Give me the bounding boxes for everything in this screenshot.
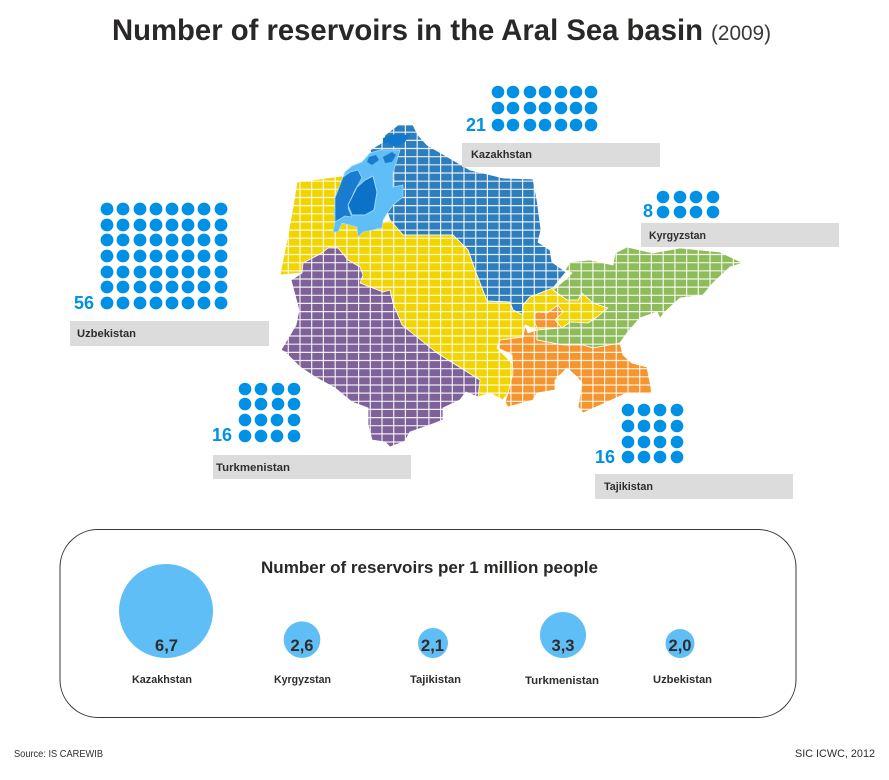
label bar: Uzbekistan: Uzbekistan: [77, 328, 136, 340]
label bar: Turkmenistan: Turkmenistan: [216, 462, 290, 474]
label bar: Kazakhstan: [462, 143, 660, 167]
bubble: Kazakhstan: [119, 564, 213, 686]
count: Turkmenistan: 16: [212, 425, 232, 445]
label bar: Kyrgyzstan: [641, 223, 839, 247]
bubble: Uzbekistan: Uzbekistan: [653, 674, 712, 686]
label bar: Kazakhstan: Kazakhstan: [471, 149, 532, 161]
label bar: Tajikistan: Tajikistan: [604, 481, 653, 493]
dots: Kazakhstan: [492, 86, 597, 131]
label bar: Uzbekistan: [70, 321, 269, 346]
panel heading: Number of reservoirs per 1 million people: [261, 558, 598, 577]
title: (2009): [711, 22, 771, 45]
bubble: Turkmenistan: Turkmenistan: [525, 675, 599, 687]
dots: Tajikistan: [622, 404, 683, 463]
map of the Aral Sea basin: [270, 120, 750, 452]
bubble: Tajikistan: Tajikistan: [410, 674, 461, 686]
region: Tajikistan: [498, 305, 652, 413]
region: Kyrgyzstan: [537, 247, 743, 348]
bubble: Tajikistan: [410, 628, 461, 686]
count: Tajikistan: 16: [595, 447, 615, 467]
region: Turkmenistan: [281, 248, 480, 447]
label bar: Kyrgyzstan: Kyrgyzstan: [649, 230, 706, 242]
bubble: Turkmenistan: [525, 612, 599, 687]
bubble: Turkmenistan: 3,3: [552, 636, 574, 655]
count: Kazakhstan: 21: [466, 115, 486, 135]
Tajikistan reservoirs: [595, 404, 793, 499]
region: Uzbekistan: [280, 176, 608, 400]
dots: Kyrgyzstan: [657, 191, 719, 218]
count: Kyrgyzstan: 8: [643, 201, 653, 221]
panel: reservoirs per 1 million people: [60, 530, 796, 718]
credit note: SIC ICWC, 2012: [795, 748, 875, 760]
Kazakhstan reservoirs: [462, 86, 660, 167]
bubble: Kyrgyzstan: [274, 621, 331, 686]
Uzbekistan reservoirs: [70, 203, 269, 346]
Kyrgyzstan reservoirs: [641, 191, 839, 247]
label bar: Tajikistan: [595, 474, 793, 499]
bubble: Uzbekistan: [653, 629, 712, 686]
bubble: Kazakhstan: Kazakhstan: [132, 674, 192, 686]
bubble: Kazakhstan: 6,7: [155, 636, 178, 655]
dots: Uzbekistan: [101, 203, 227, 309]
source note: Source: IS CAREWIB: [14, 749, 103, 760]
bubble: Tajikistan: 2,1: [421, 636, 444, 655]
count: Uzbekistan: 56: [74, 293, 94, 313]
region: Kazakhstan: [370, 125, 566, 315]
Turkmenistan reservoirs: [212, 383, 411, 479]
bubble: Kyrgyzstan: Kyrgyzstan: [274, 674, 331, 686]
bubble: Kyrgyzstan: 2,6: [290, 636, 314, 655]
panel frame: [60, 530, 796, 718]
dots: Turkmenistan: [239, 383, 300, 442]
Aral Sea: [333, 134, 410, 237]
bubble: Uzbekistan: 2,0: [668, 636, 692, 655]
title: Number of reservoirs in the Aral Sea basin: [112, 14, 703, 47]
label bar: Turkmenistan: [213, 455, 411, 479]
